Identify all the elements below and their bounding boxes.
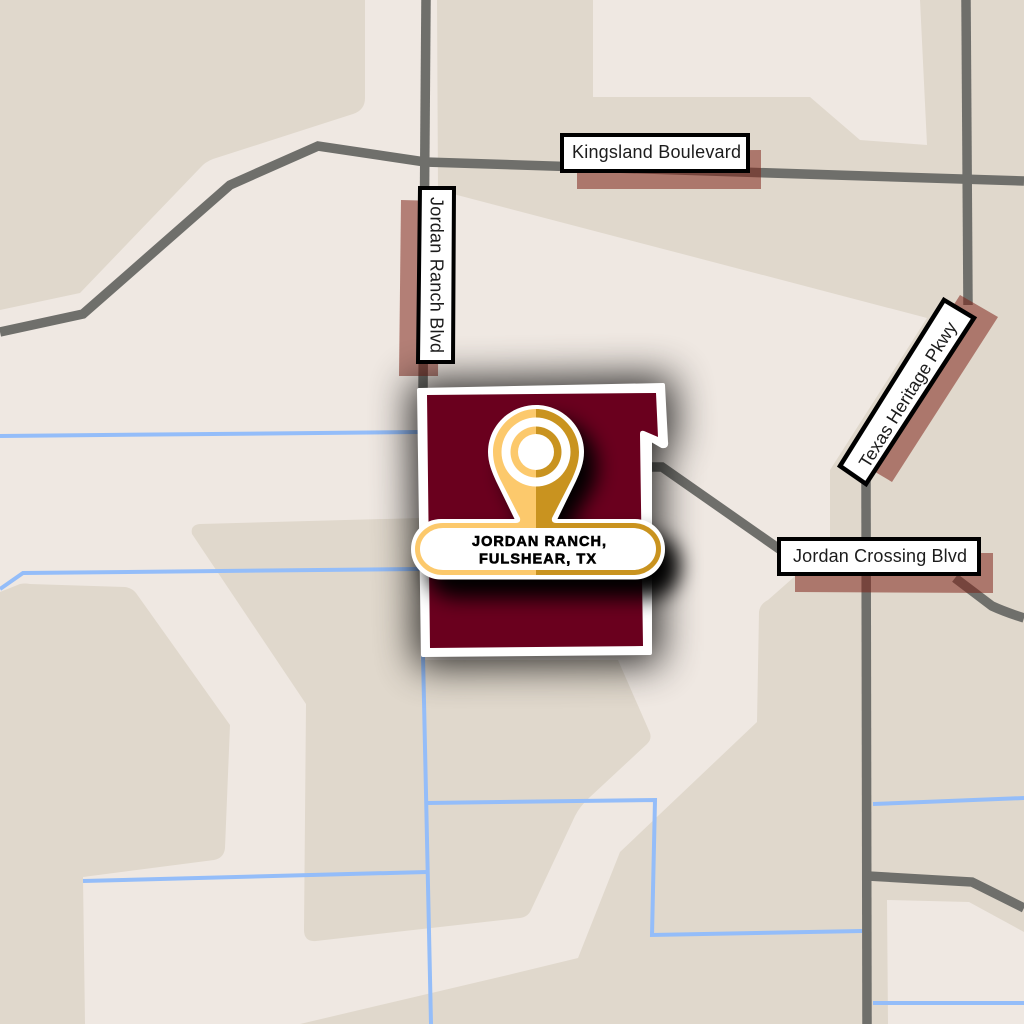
pin center xyxy=(518,434,554,470)
location pin icon xyxy=(488,405,584,527)
pill gold border left xyxy=(418,526,536,572)
label: Jordan Ranch Blvd: Jordan Ranch Blvd xyxy=(426,197,446,353)
parcel shadow xyxy=(410,376,676,666)
pin gold ring left xyxy=(511,426,536,478)
road highlight bands xyxy=(399,150,998,593)
site parcel marker xyxy=(410,376,680,666)
label: Kingsland Boulevard xyxy=(562,135,748,171)
location name xyxy=(472,534,606,568)
location name: JORDAN RANCH, xyxy=(472,534,606,550)
location name pill xyxy=(411,519,665,580)
pill white outline xyxy=(411,519,665,580)
label: Jordan Crossing Blvd xyxy=(779,539,979,574)
pin and label shadow xyxy=(426,419,680,598)
pin white outline xyxy=(488,405,584,522)
pin gold ring right xyxy=(536,426,562,478)
location name: FULSHEAR, TX xyxy=(479,552,596,568)
pin left half xyxy=(493,409,536,527)
pin white ring xyxy=(502,418,570,486)
label: Jordan Ranch Blvd xyxy=(418,188,454,362)
water lines xyxy=(0,432,1024,1024)
label: Kingsland Boulevard: Kingsland Boulevard xyxy=(572,142,741,162)
label: Texas Heritage Pkwy xyxy=(840,300,974,484)
pill gold border right xyxy=(536,526,658,572)
parcel maroon fill xyxy=(427,393,658,648)
label: Jordan Crossing Blvd: Jordan Crossing Blvd xyxy=(793,546,967,566)
pin right half xyxy=(536,409,579,527)
parcel white outline xyxy=(419,385,666,655)
label: Texas Heritage Pkwy: Texas Heritage Pkwy xyxy=(855,318,961,471)
